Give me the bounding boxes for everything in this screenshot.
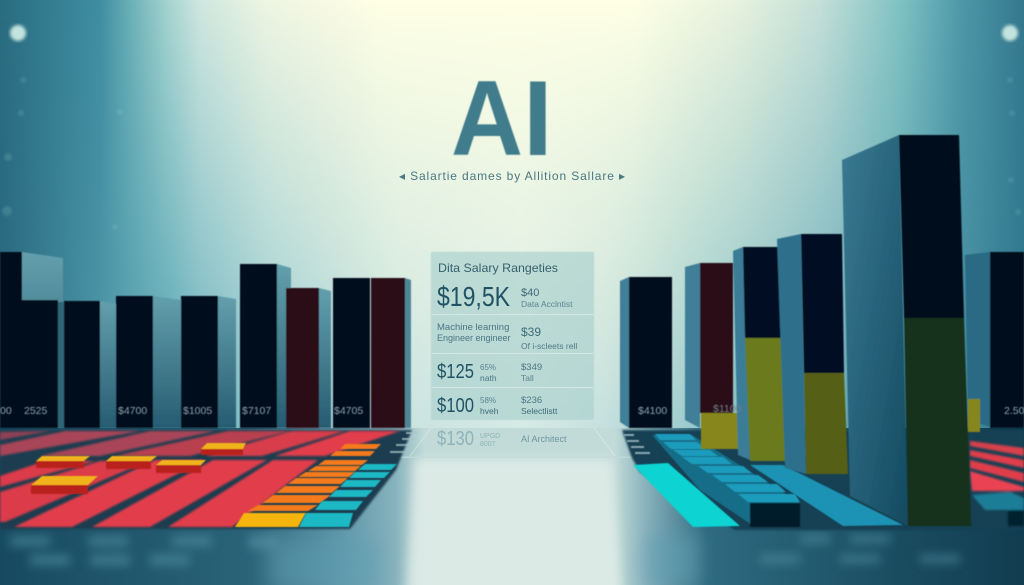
right bar value labels: 2.50 — [1004, 405, 1024, 417]
subtitle: ◂ Salartie dames by Allition Sallare ▸ — [399, 169, 625, 183]
faded reflected row — [437, 428, 567, 450]
row 2: Engineer engineer — [437, 333, 511, 343]
left bar value labels: $4700 — [118, 405, 147, 417]
yellow strip end — [235, 513, 306, 527]
faint dotted line left — [2, 77, 123, 230]
row 2: Machine learning — [437, 322, 509, 333]
right floor stripes — [970, 441, 1024, 526]
teal segmented strip — [652, 434, 800, 527]
bar 4 — [116, 296, 181, 428]
bar 6 — [240, 264, 291, 428]
bar 5 — [181, 296, 236, 428]
row 3: $349 — [521, 362, 542, 373]
right small ticks — [624, 434, 650, 454]
strip end block — [750, 503, 800, 527]
left bar value labels: 00 — [0, 405, 12, 417]
bar 1 — [0, 252, 63, 428]
glowing orb right — [1002, 25, 1018, 41]
left bar value labels: $4705 — [334, 405, 363, 417]
row 3 — [437, 361, 542, 383]
bar 9 maroon — [371, 278, 411, 428]
left dark tray — [0, 430, 412, 529]
reflective floor — [0, 428, 1024, 585]
row 3: $125 — [437, 361, 474, 383]
left floor stripes — [0, 431, 400, 527]
row 4: 58% — [480, 396, 496, 405]
orange segmented strip — [235, 444, 381, 527]
row 1: Data Acclntist — [521, 299, 573, 309]
faded reflected row: 8007 — [480, 441, 496, 448]
faded reflected row: UPGD — [480, 433, 500, 440]
row 3: nath — [480, 373, 497, 383]
bright cyan strip — [633, 463, 740, 527]
left bar value labels — [0, 405, 363, 417]
left bar group — [0, 252, 411, 428]
faded reflected row: AI Architect — [521, 434, 567, 444]
row 4: $100 — [437, 395, 474, 417]
data table panel — [431, 252, 594, 420]
bar R2 maroon — [685, 263, 733, 428]
bar R4 — [777, 234, 848, 474]
right bar group — [620, 135, 1024, 526]
row 1: $40 — [521, 287, 539, 299]
left small ticks — [390, 432, 417, 453]
yellow raised tiles — [31, 443, 246, 494]
bar R6 — [965, 252, 1024, 432]
teal long strip — [750, 465, 903, 526]
faded reflected row: $130 — [437, 428, 474, 450]
left bar value labels: $1005 — [183, 405, 212, 417]
bar R1 — [620, 277, 672, 428]
background gradient — [0, 0, 1024, 428]
right bar value labels: $1100 — [713, 403, 742, 415]
row 2 — [437, 322, 577, 351]
row 1: $19,5K — [437, 281, 510, 312]
bar 7 maroon — [286, 288, 331, 428]
title: I — [523, 58, 553, 178]
right bar value labels: $4100 — [638, 405, 667, 417]
row 1 — [437, 281, 573, 312]
title: A — [451, 58, 523, 178]
row 4: Selectlistt — [521, 406, 558, 416]
left bar value labels: $7107 — [242, 405, 271, 417]
row 2: $39 — [521, 325, 541, 339]
bar 3 — [64, 301, 117, 428]
right bar value labels — [638, 403, 1024, 417]
faint dotted line right — [1007, 77, 1021, 215]
row 4: hveh — [480, 406, 499, 416]
row 2: Of i-scleets rell — [521, 341, 577, 351]
glowing orb left — [10, 25, 26, 41]
bar R5 large — [842, 135, 971, 526]
bar R3 — [733, 247, 788, 461]
row 3: Tall — [521, 373, 534, 383]
left bar value labels: 2525 — [24, 405, 48, 417]
row 3: 65% — [480, 363, 496, 372]
row 4: $236 — [521, 395, 542, 406]
bar 2 — [22, 300, 64, 428]
bar 8 — [333, 278, 370, 428]
right dark tray — [622, 430, 1024, 530]
cyan segmented strip left — [299, 464, 397, 527]
row 4 — [437, 395, 558, 417]
small olive box — [701, 413, 740, 449]
table heading: Dita Salary Rangeties — [438, 261, 558, 275]
